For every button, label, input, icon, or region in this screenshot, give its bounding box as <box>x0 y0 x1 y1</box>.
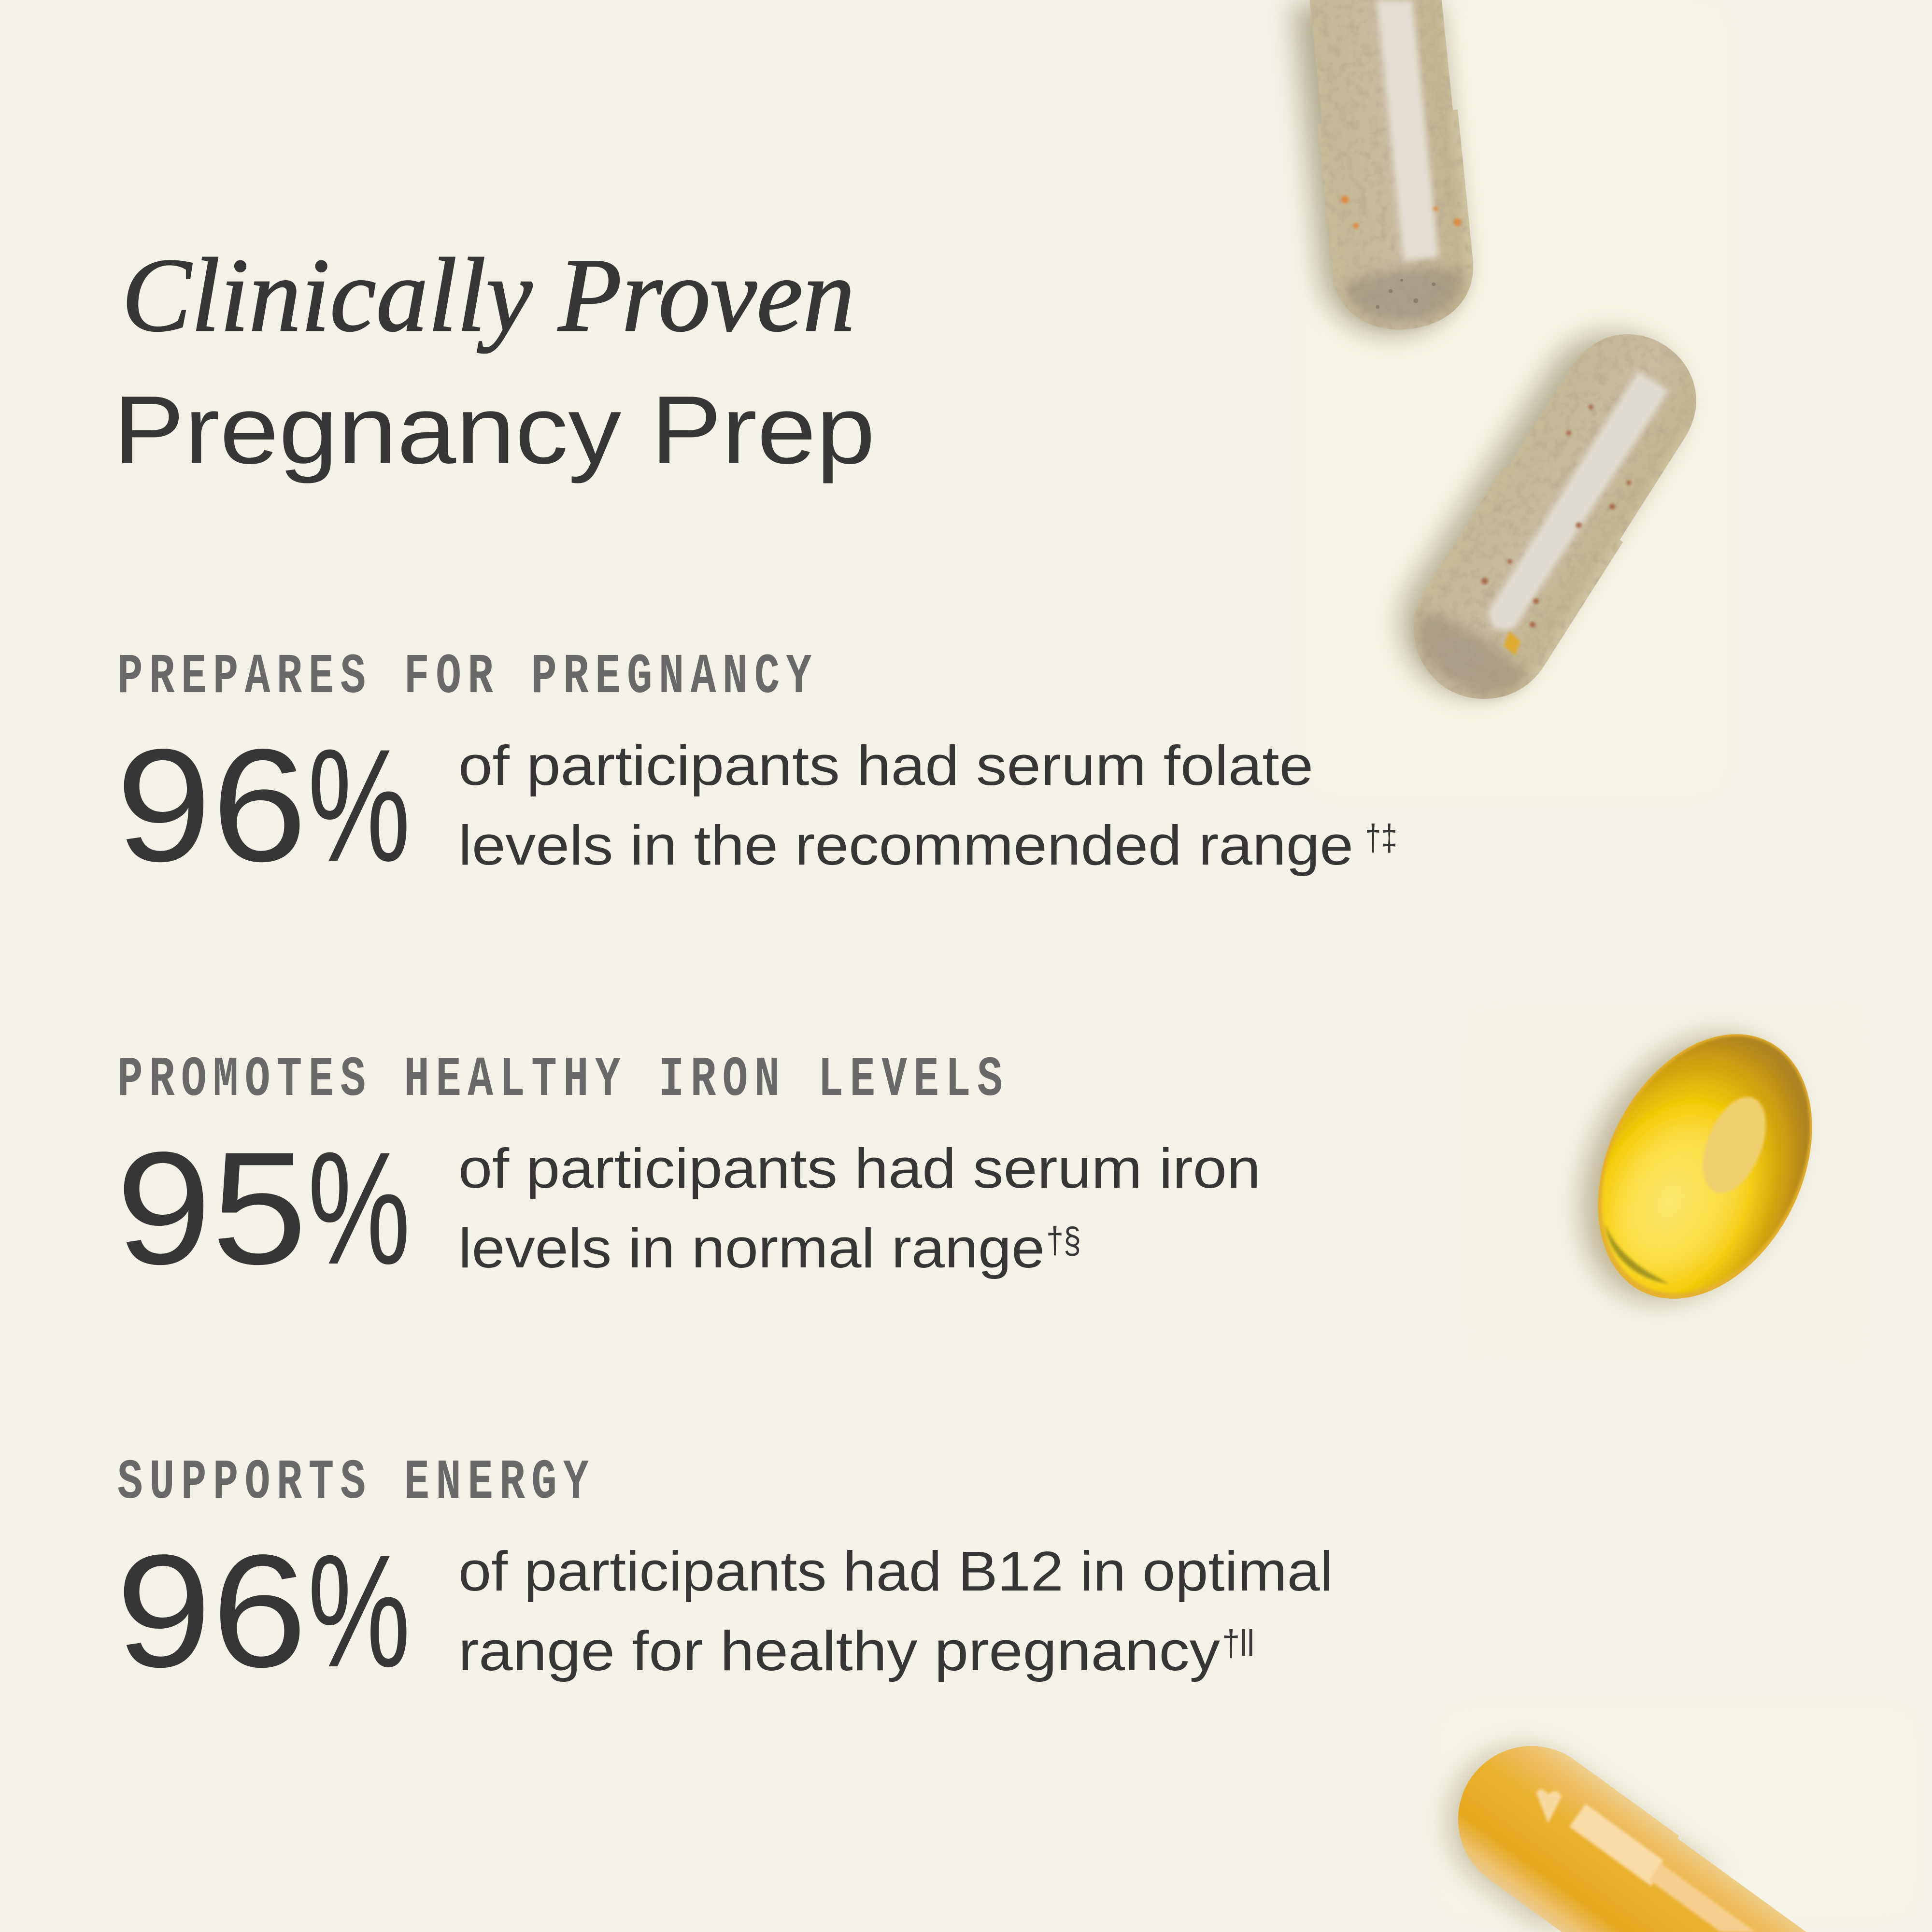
stat: % <box>308 1521 411 1701</box>
section: promotes healthy iron levels <box>116 1049 1261 1298</box>
description: levels in normal range <box>458 1217 1045 1279</box>
label: PREPARES FOR PREGNANCY <box>117 646 818 710</box>
stat: % <box>308 716 411 895</box>
stat: % <box>308 1119 411 1298</box>
description <box>458 1137 1261 1279</box>
capsule: bottom orange pill <box>1449 1746 1806 1932</box>
stat: 95 <box>116 1119 307 1298</box>
description: †§ <box>1046 1220 1081 1261</box>
stat: 96 <box>116 716 307 895</box>
description: of participants had serum iron <box>458 1137 1261 1200</box>
title line: Clinically Proven: Clinically Proven <box>122 237 855 354</box>
stat: 96 <box>116 1521 307 1701</box>
label: PROMOTES HEALTHY IRON LEVELS <box>117 1049 1009 1112</box>
title <box>114 237 875 484</box>
description <box>458 1540 1333 1682</box>
capsule: middle beige pill <box>1374 300 1724 728</box>
stat <box>116 1119 411 1298</box>
description: range for healthy pregnancy <box>458 1619 1220 1682</box>
description: levels in the recommended range <box>458 814 1353 877</box>
stat <box>116 1521 411 1701</box>
description: †‡ <box>1365 817 1397 858</box>
softgel: yellow oval <box>1539 992 1855 1343</box>
section: supports energy <box>116 1451 1333 1701</box>
section: prepares for pregnancy <box>116 646 1397 895</box>
background tint behind capsules <box>1304 0 1932 1932</box>
description: of participants had serum folate <box>458 734 1313 797</box>
capsule: top beige pill <box>1293 0 1479 341</box>
description <box>458 734 1397 877</box>
title line: Pregnancy Prep: Pregnancy Prep <box>114 376 875 484</box>
label: SUPPORTS ENERGY <box>117 1451 595 1515</box>
stat <box>116 716 411 895</box>
description: †ll <box>1222 1623 1254 1664</box>
description: of participants had B12 in optimal <box>458 1540 1333 1603</box>
